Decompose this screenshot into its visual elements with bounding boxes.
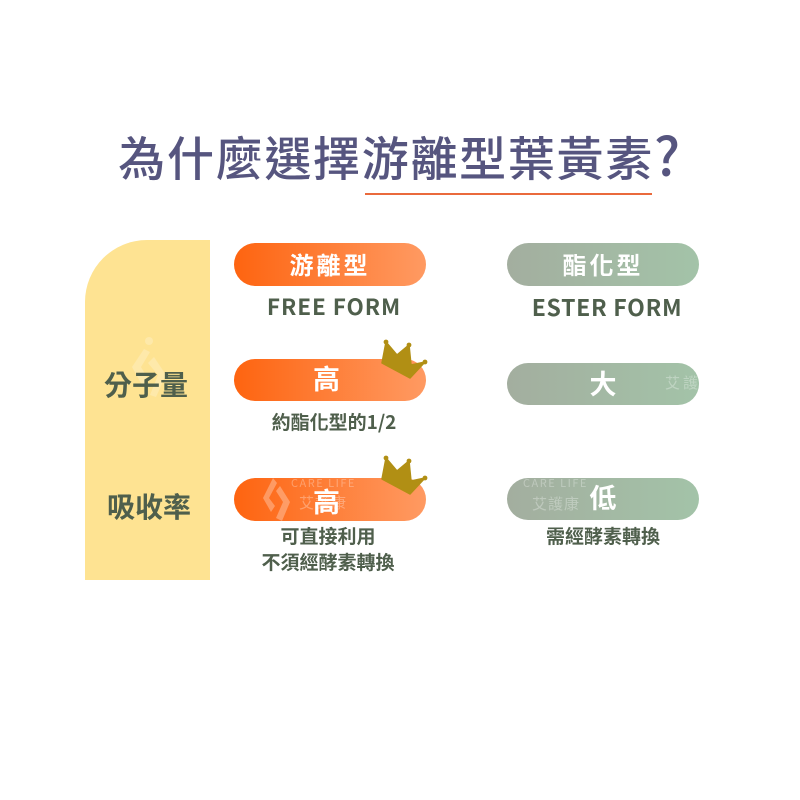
watermark logo xyxy=(263,478,290,521)
text: ESTER FORM: ESTER FORM xyxy=(532,289,682,323)
text: directly usable: 可直接利用 xyxy=(280,522,376,549)
watermark name: 艾護康 xyxy=(299,492,347,513)
pill: ester form: 酯化型 xyxy=(562,246,644,281)
pill: high absorption xyxy=(234,478,426,521)
pill: large molecular size: 大 xyxy=(590,363,616,402)
pill: low absorption: 低 xyxy=(590,478,616,516)
title: 為什麼選擇游離型葉黃素? xyxy=(118,116,682,192)
panel: row labels xyxy=(85,240,210,580)
pill: high molecular size xyxy=(234,359,426,401)
pill: large molecular size xyxy=(507,363,699,405)
pill: free form xyxy=(234,243,426,286)
label: molecular size: 分子量 xyxy=(104,364,188,404)
label: absorption: 吸收率 xyxy=(107,486,191,526)
pill: free form: 游離型 xyxy=(290,246,370,281)
title underline xyxy=(365,193,652,195)
text: directly usable: 不須經酵素轉換 xyxy=(261,548,394,575)
icon: crown xyxy=(381,456,428,495)
watermark name: 艾護康 xyxy=(532,493,580,514)
icon: crown xyxy=(381,340,428,379)
text: about half: 約酯化型的1/2 xyxy=(272,408,396,435)
pill: high absorption: 高 xyxy=(313,481,340,520)
pill: ester form xyxy=(507,243,699,286)
pill: low absorption xyxy=(507,478,699,520)
text: directly usable xyxy=(261,522,394,575)
watermark logo xyxy=(132,337,165,397)
text: FREE FORM: FREE FORM xyxy=(267,290,401,322)
text: needs enzyme conversion: 需經酵素轉換 xyxy=(546,522,660,549)
pill: high molecular size: 高 xyxy=(313,359,340,397)
